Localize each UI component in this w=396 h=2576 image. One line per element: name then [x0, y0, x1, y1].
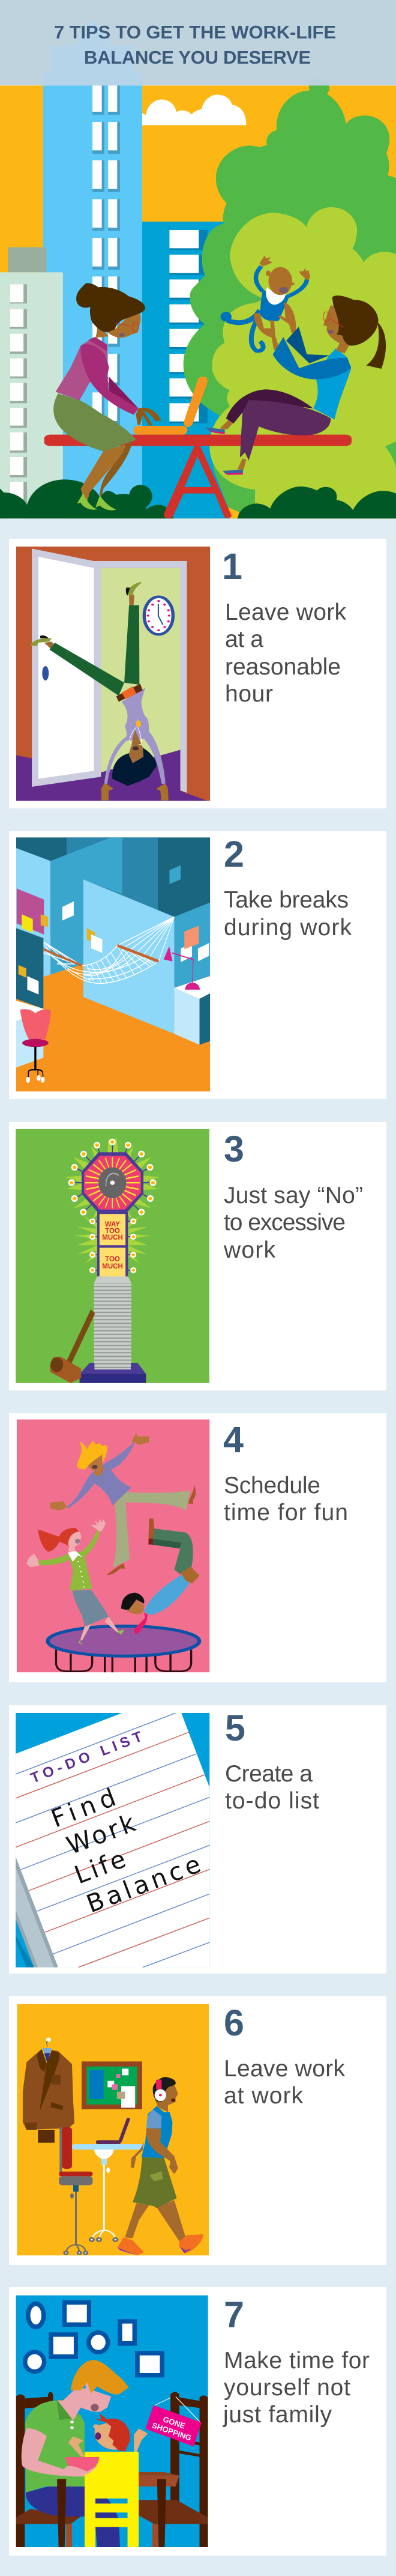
hero illustration: seesaw balancing work and family: [0, 85, 396, 518]
number 6: 6: [224, 2002, 244, 2043]
tip 4 text: Schedule: [224, 1473, 320, 1499]
number 5: 5: [225, 1708, 245, 1748]
illustration: strength tester with paper stack: [16, 1129, 209, 1383]
panel: tip 5: [9, 1705, 386, 1974]
office chair: [59, 2127, 92, 2255]
chairs and table: [16, 2392, 208, 2547]
baby being lifted: [220, 255, 310, 351]
tip 3 text: Just say “No”: [224, 1183, 363, 1208]
mother's hands holding baby: [254, 302, 296, 350]
tip 7 text: [223, 2348, 370, 2428]
bushes: [0, 479, 396, 518]
sunburst rays: [65, 1136, 160, 1264]
tip 1 text: reasonable: [225, 654, 341, 680]
panel: tip 1: [9, 539, 386, 808]
large green tree: [184, 85, 396, 518]
upside-down woman: [31, 582, 169, 801]
tip 6 text: at work: [224, 2083, 304, 2109]
bulletin board: [82, 2061, 142, 2109]
meter labels: TOO: [105, 1228, 120, 1235]
title: 7 TIPS TO GET THE WORK-LIFE: [54, 22, 336, 43]
seesaw: [44, 435, 352, 518]
tip 3 text: to excessive: [224, 1210, 346, 1235]
panel: tip 3: [9, 1122, 386, 1390]
tip 7 text: Make time for: [224, 2348, 370, 2374]
woman with laptop: [53, 283, 208, 511]
tip 3 text: work: [223, 1237, 276, 1263]
base: [80, 1363, 146, 1383]
panel: tip 7: [9, 2287, 386, 2556]
tip 2 text: during work: [224, 915, 352, 941]
illustration: leaving the office: [17, 2004, 209, 2255]
father: [22, 2360, 129, 2517]
clipboard edge: [16, 1857, 58, 1968]
tip 6 text: Leave work: [224, 2056, 346, 2082]
header band: [0, 0, 396, 92]
hanging coat: [23, 2038, 74, 2143]
panel: tip 6: [9, 1996, 386, 2265]
meter labels: TOO: [105, 1256, 120, 1263]
gone shopping sign text: GONE: [162, 2414, 187, 2431]
illustration: handstand out the door: [16, 547, 210, 802]
number 3: 3: [224, 1129, 244, 1169]
handwritten list: Balance: [83, 1849, 205, 1918]
desk and laptop: [72, 2119, 145, 2242]
sky-blue tower: [43, 85, 142, 518]
title: [54, 22, 336, 68]
title: BALANCE YOU DESERVE: [84, 47, 311, 68]
tip 5 text: Create a: [225, 1761, 313, 1787]
bulbs: [68, 1139, 157, 1273]
bowl and hand: [64, 2457, 99, 2476]
dial octagon: [82, 1152, 143, 1213]
child in high chair: [68, 2413, 148, 2547]
to-do list heading: TO-DO LIST: [28, 1729, 145, 1787]
meter labels: MUCH: [102, 1263, 123, 1270]
walking man with headphones: [118, 2077, 203, 2255]
wall picture frames: [23, 2300, 164, 2377]
tip 7 text: yourself not: [224, 2375, 350, 2401]
desk lamp: [164, 947, 200, 990]
cloud: [142, 95, 246, 125]
tip 6 text: [224, 2056, 346, 2109]
illustration: father and child at the table: [16, 2296, 208, 2547]
number 2: 2: [224, 834, 244, 874]
mallet: [50, 1311, 93, 1383]
front table legs: [57, 2479, 166, 2547]
tip 1 text: [225, 599, 347, 707]
pink chair: [20, 1009, 51, 1083]
handwritten list: Life: [71, 1844, 130, 1890]
pale green building: [0, 247, 63, 518]
handwritten list: [47, 1783, 205, 1918]
paper stack: [94, 1276, 131, 1370]
wall clock: [144, 597, 173, 634]
ruled lines: [16, 1712, 211, 1968]
illustration: trampoline fun: [17, 1419, 209, 1672]
lime tree: [209, 207, 396, 518]
tip 2 text: [224, 887, 352, 941]
handwritten list: Find: [47, 1783, 119, 1833]
handwritten list: Work: [63, 1808, 139, 1860]
woman with red ponytail: [26, 1518, 125, 1645]
mother on seesaw: [205, 295, 386, 475]
teal building: [142, 222, 243, 518]
meter labels: MUCH: [102, 1234, 123, 1241]
illustration: office hammock: [16, 837, 210, 1091]
sticky notes and pinboard: [17, 888, 209, 995]
tip 1 text: at a: [225, 626, 263, 652]
number 1: 1: [222, 546, 242, 587]
meter column: [97, 1212, 128, 1280]
number 4: 4: [223, 1419, 244, 1460]
tip 1 text: Leave work: [225, 599, 347, 625]
panel: tip 4: [9, 1413, 386, 1682]
tip 5 text: [225, 1761, 319, 1814]
tip 1 text: hour: [225, 681, 273, 707]
man tumbling: [121, 1518, 200, 1635]
tip 3 text: [223, 1183, 363, 1263]
meter labels: WAY: [105, 1221, 120, 1228]
illustration: to-do list paper: [16, 1712, 211, 1968]
tip 4 text: [224, 1473, 348, 1526]
meter labels: [102, 1221, 123, 1270]
gone shopping sign text: SHOPPING: [151, 2420, 193, 2443]
tip 2 text: Take breaks: [224, 887, 349, 913]
tip 4 text: time for fun: [224, 1500, 348, 1526]
panel: tip 2: [9, 831, 386, 1099]
gone shopping sign: [145, 2397, 202, 2446]
number 7: 7: [224, 2294, 244, 2335]
tip 5 text: to-do list: [225, 1788, 319, 1814]
hammock: [43, 917, 174, 983]
trampoline: [48, 1626, 199, 1672]
jumping woman in purple: [50, 1433, 196, 1575]
tip 7 text: just family: [223, 2402, 332, 2428]
